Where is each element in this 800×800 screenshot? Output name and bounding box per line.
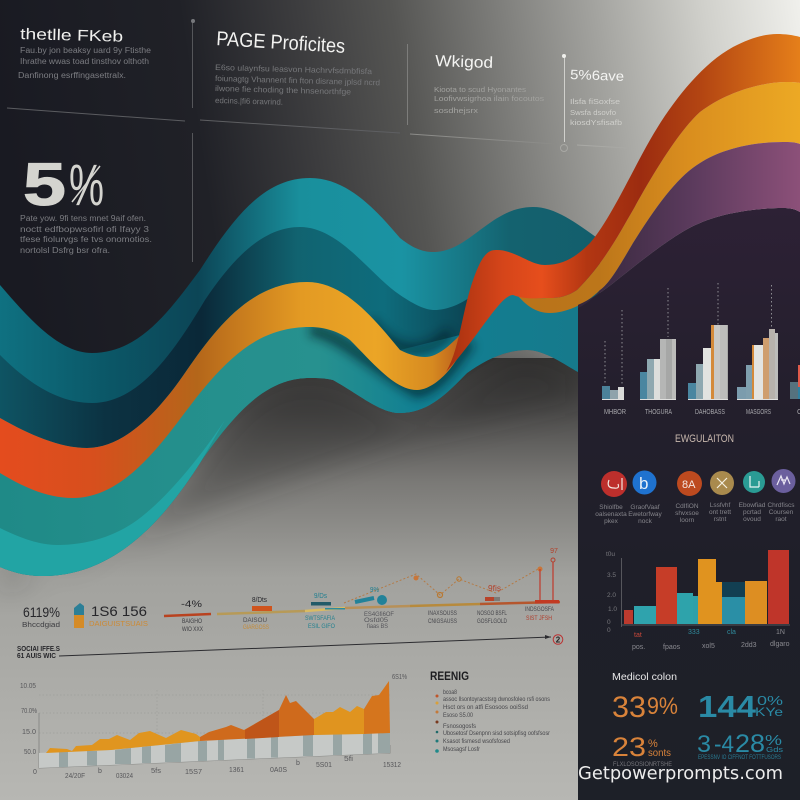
text block: stat description: noctt edfbopwsofirl ofi Ifayy 3 bbox=[20, 225, 150, 234]
event: 8/Dts: DAISOU bbox=[243, 617, 267, 624]
text block: thetlle FKeb: Ihrathe wwas toad tinsthov olthoth bbox=[20, 57, 149, 66]
stats heading: Medicol colon bbox=[612, 671, 677, 683]
icon: blue circle: b bbox=[639, 474, 648, 493]
column labels: DAHOBASS bbox=[695, 409, 725, 416]
text block: arrow label: SOCIAI IFFE.S bbox=[17, 646, 60, 653]
icon labels: pkex bbox=[604, 518, 619, 525]
text block: PAGE Proficites: PAGE Proficites bbox=[216, 28, 346, 58]
axis labels: 1361 bbox=[229, 767, 244, 774]
icon labels: Shiolfbe bbox=[599, 504, 623, 511]
icon labels: rstnt bbox=[714, 516, 727, 523]
text block: PAGE Proficites: edcins.|fi6 oravrind. bbox=[215, 96, 283, 107]
icon labels: Chrdfiscs bbox=[767, 502, 795, 509]
text block: PAGE Proficites: ilwone fie choding the hnsenorthfge bbox=[215, 84, 352, 97]
text block: PAGE Proficites: E6so ulaynfsu leasvon Hachrvfsdmbfisfa bbox=[215, 63, 373, 76]
grey base band bbox=[39, 733, 390, 768]
text block: thetlle FKeb: Danfinong esrffingasettralx. bbox=[18, 71, 126, 80]
stat: 3-428%: 28 bbox=[735, 730, 765, 758]
axis bbox=[622, 558, 790, 627]
stat: 6119% bbox=[22, 605, 60, 629]
event: -4%: -4% bbox=[181, 599, 203, 610]
icon: teal circle bbox=[743, 471, 765, 493]
axis labels: 0A0S bbox=[270, 767, 287, 774]
axis labels: 3.5 bbox=[607, 572, 616, 579]
text block: thetlle FKeb: Fau.by jon beaksy uard 9y Ftisthe bbox=[20, 46, 152, 55]
axis labels: 6S1% bbox=[392, 674, 407, 681]
watermark: Getpowerprompts.com bbox=[578, 763, 783, 784]
stat: 6119%: 6119% bbox=[23, 605, 60, 620]
legend text bbox=[443, 689, 551, 753]
icon labels: raot bbox=[775, 516, 787, 523]
legend text: bcoa8 bbox=[443, 689, 457, 696]
big stat: 5%: % bbox=[69, 153, 104, 218]
icon labels bbox=[595, 502, 795, 525]
arrow line with circled marker: 2 bbox=[556, 636, 561, 644]
stat: 23: 23 bbox=[612, 732, 646, 762]
icon labels: Lssfvhf bbox=[710, 502, 730, 509]
stat: 3-428%: -4 bbox=[714, 731, 734, 758]
axis labels: 15.0 bbox=[22, 729, 36, 736]
x labels: 333 bbox=[688, 629, 700, 636]
x labels: xol5 bbox=[702, 643, 715, 650]
column group 1 bbox=[602, 386, 624, 399]
column group 3 bbox=[688, 325, 728, 399]
x labels: dlgaro bbox=[770, 641, 790, 648]
text block: stat description bbox=[20, 214, 152, 255]
wave: lightest teal sliver bbox=[0, 420, 225, 576]
timeline base line bbox=[164, 602, 560, 616]
icon labels: loorn bbox=[680, 517, 695, 524]
icon labels: oalsenaxta bbox=[595, 511, 627, 518]
text block: PAGE Proficites bbox=[215, 28, 380, 107]
axis labels: 0 bbox=[607, 627, 611, 634]
icon row bbox=[595, 469, 796, 525]
axis labels: 5fs bbox=[151, 768, 162, 775]
heading: EWGULAITON: EWGULAITON bbox=[675, 433, 734, 445]
text block: thetlle FKeb: thetlle FKeb bbox=[20, 26, 123, 46]
area: darker middle sections bbox=[245, 710, 279, 739]
icon: tan circle bbox=[710, 471, 734, 495]
icon labels: Coursen bbox=[769, 509, 794, 516]
text block: Wkigod bbox=[434, 53, 544, 115]
event: end label: INDSGOSFA bbox=[525, 606, 554, 613]
wave: yellow ribbon bbox=[513, 82, 800, 313]
column group 4 bbox=[737, 329, 778, 399]
icon: purple circle bbox=[772, 469, 796, 493]
event: label group 6: INAXSOUSS bbox=[428, 610, 458, 617]
big stat: 5% bbox=[23, 151, 104, 218]
axis labels: 15312 bbox=[383, 762, 401, 769]
event: key marker bbox=[355, 587, 394, 630]
event: end label: 97 bbox=[550, 548, 558, 555]
legend text: Ubosetosf Dsenpnn sisd sotsipfisg oofsfsosr bbox=[443, 730, 551, 737]
bars bbox=[624, 610, 633, 624]
column labels: MASGORS bbox=[746, 409, 771, 416]
text block: stat description: Pate yow. 9fi tens mnet 9aif ofen. bbox=[20, 214, 146, 223]
axis labels: 5fi bbox=[344, 756, 354, 763]
wave: shadow above orange band bbox=[370, 322, 450, 349]
legend text: Msosagsf Losfr bbox=[443, 746, 481, 753]
axis labels: 10.05 bbox=[20, 683, 36, 690]
text block: arrow label: 61 AUIS WIC bbox=[17, 653, 56, 660]
axis labels: 2.0 bbox=[607, 592, 616, 599]
wave: red-orange ribbon bbox=[446, 34, 800, 372]
stat: 3-428%: % bbox=[765, 732, 782, 749]
wave: shadow beneath orange band bbox=[310, 330, 470, 392]
column labels bbox=[604, 409, 800, 416]
stat: 33 9%: 33 bbox=[612, 691, 646, 724]
icon: orange circle: 8A bbox=[682, 479, 696, 491]
wave: lower teal band bbox=[0, 282, 578, 576]
dotted trend line bbox=[344, 568, 540, 603]
x labels: 2dd3 bbox=[741, 642, 757, 649]
axis labels: t0u bbox=[606, 551, 615, 558]
stat: 3-428%: 3 bbox=[697, 731, 711, 758]
text block: Wkigod: Wkigod bbox=[435, 53, 493, 72]
trend markers bbox=[414, 566, 542, 598]
stat captions: FLXLOSOSIONRTSHE bbox=[613, 762, 672, 768]
axis labels bbox=[20, 674, 407, 780]
x labels: pos. bbox=[632, 644, 645, 651]
event: teal marker: SWTSFAFIA bbox=[305, 615, 336, 622]
wave: dark teal band bbox=[0, 227, 470, 470]
icon labels: ovoud bbox=[743, 516, 761, 523]
axis labels: 50.0 bbox=[24, 749, 36, 756]
column labels: MHBOR bbox=[604, 409, 626, 416]
axis labels: 5S01 bbox=[316, 762, 332, 769]
dotted leader lines bbox=[605, 283, 772, 386]
red stems bbox=[540, 562, 553, 601]
stat: 3-428% bbox=[697, 730, 784, 758]
stat: 23 bbox=[612, 732, 671, 762]
grey base columns bbox=[59, 733, 390, 767]
stat: 144 0%: 144 bbox=[698, 689, 757, 724]
icon labels: nock bbox=[638, 518, 653, 525]
event: 8/Dts: 8/Dts bbox=[252, 595, 267, 604]
text block: 5%6ave: Swsfa dsovfo bbox=[570, 108, 616, 117]
icon: blue circle bbox=[632, 470, 656, 494]
wave: orange band bbox=[0, 282, 462, 498]
stat: 1S6 156: 1S6 156 bbox=[91, 603, 147, 619]
event: 8/Dts bbox=[243, 595, 272, 631]
text block: Wkigod: Loofivwsigrhoa ilain focoutos bbox=[434, 94, 544, 103]
event: end label: SIST JFSH bbox=[526, 615, 552, 622]
stat: 144 0%: 0% bbox=[757, 693, 784, 708]
column group 5 bbox=[790, 365, 800, 399]
axis labels: 70.0% bbox=[21, 708, 37, 715]
legend text: Ksasot fismesd wsofsfosed bbox=[443, 738, 510, 745]
event: -4%: BAIGHO bbox=[182, 618, 202, 625]
event: 9/Ds red marker: GOSFLGOLD bbox=[477, 618, 507, 625]
event: key marker: Osfd05 bbox=[364, 617, 388, 624]
event: key marker: ES4Gfi6OF bbox=[364, 611, 394, 618]
x labels: tat bbox=[634, 632, 642, 639]
icon labels: Ewetorfway bbox=[628, 511, 663, 518]
area: orange middle bbox=[200, 695, 314, 741]
legend markers bbox=[435, 694, 439, 753]
stat: 33 9% bbox=[612, 691, 678, 724]
event: 9/Ds red marker: 9fis bbox=[488, 584, 501, 593]
text block: 5%6ave: Ilsfa fiSoxfse bbox=[570, 97, 620, 106]
timeline bbox=[164, 548, 560, 633]
header divider lines bbox=[7, 19, 627, 262]
text block: stat description: tfese fiolurvgs fe tvs onomotios. bbox=[20, 235, 152, 244]
text block: 5%6ave: 5%6ave bbox=[570, 67, 624, 84]
x labels: 1N bbox=[776, 629, 785, 636]
text block: thetlle FKeb bbox=[18, 26, 152, 80]
wave: upper teal band bbox=[0, 178, 600, 576]
legend text: Hsct ors on atfi Esosoos ooiSsd bbox=[443, 704, 528, 711]
event: -4%: WIO XXX bbox=[182, 626, 203, 633]
icon: red circle bbox=[601, 471, 627, 497]
panel: dark right column bbox=[578, 208, 800, 800]
event: 9/Ds red marker bbox=[477, 584, 507, 625]
column labels: THOGURA bbox=[645, 409, 672, 416]
text block: Wkigod: sosdhejsrx bbox=[434, 106, 478, 115]
axis labels: 03024 bbox=[116, 773, 133, 780]
area: orange right bbox=[364, 681, 390, 734]
legend text: Fsnosogosfs bbox=[443, 723, 477, 730]
x labels: fpaos bbox=[663, 644, 681, 651]
axis labels: 24/20F bbox=[65, 773, 85, 780]
text block: 5%6ave: kiosdYsfisafb bbox=[570, 118, 622, 127]
stat: 3-428%: Gds bbox=[766, 747, 784, 754]
axis labels: b bbox=[296, 760, 300, 767]
event: label group 6 bbox=[428, 610, 458, 625]
text block: Wkigod: Kioota to scud Hyonantes bbox=[434, 85, 526, 94]
event: 9/Ds red marker: NOSGO BSFL bbox=[477, 610, 507, 617]
shadow under wave bbox=[0, 360, 578, 590]
icon: orange circle bbox=[677, 471, 702, 496]
stats block bbox=[612, 671, 784, 768]
text block: arrow label bbox=[17, 646, 60, 660]
axes bbox=[39, 713, 390, 768]
stat: 144 0%: KYe bbox=[755, 705, 783, 719]
legend bbox=[430, 669, 551, 753]
big stat: 5%: 5 bbox=[23, 151, 66, 218]
icon labels: Ebowfiad bbox=[739, 502, 766, 509]
stat: 1S6 156 bbox=[89, 603, 148, 628]
wave: purple band bbox=[578, 142, 800, 308]
icon labels: CdIfiON bbox=[675, 503, 699, 510]
event: 8/Dts: GIARGOSS bbox=[243, 624, 269, 631]
bar chart: grouped columns bbox=[602, 283, 800, 416]
stat: 23: % bbox=[648, 738, 658, 750]
legend title: REENIG bbox=[430, 669, 469, 683]
arrow line with circled marker bbox=[59, 635, 563, 656]
legend text: assoc Ilsontoyracstsrg dwnosfoleo rsfi osons bbox=[443, 696, 551, 703]
icon labels: ont trett bbox=[709, 509, 731, 516]
axis labels: 0 bbox=[607, 619, 611, 626]
bar chart: multicolour bbox=[606, 550, 790, 651]
icon: blue-orange bookmark bbox=[74, 603, 84, 628]
icon labels: GraofVaaf bbox=[630, 504, 660, 511]
axis labels bbox=[606, 551, 617, 634]
area chart bbox=[20, 674, 407, 780]
event: teal marker: 9/Ds bbox=[314, 593, 327, 600]
axis labels: b bbox=[98, 768, 102, 775]
axis labels: 15S7 bbox=[185, 769, 202, 776]
area: yellow left bbox=[46, 730, 200, 753]
x labels: cla bbox=[727, 629, 736, 636]
event: end label bbox=[525, 548, 558, 622]
event: key marker: 9% bbox=[370, 587, 379, 594]
event: -4% bbox=[181, 599, 203, 633]
text block: stat description: nortolsl Dsfrg bsr ofra. bbox=[20, 246, 110, 255]
area: yellow right bbox=[314, 706, 364, 735]
legend text: Esoso S5.00 bbox=[443, 712, 473, 719]
stat: 1S6 156: DAIGUISTSUAIS bbox=[89, 619, 148, 628]
icon labels: shvxsoe bbox=[675, 510, 699, 517]
event: label group 6: CNIGSAUSS bbox=[428, 618, 457, 625]
text block: PAGE Proficites: foiunagtg Vhannent fin fton disrane jplsd ncrd bbox=[215, 74, 380, 87]
text block: 5%6ave bbox=[570, 67, 624, 127]
x labels bbox=[632, 629, 790, 651]
event: teal marker: ESIL GIFO bbox=[308, 623, 335, 630]
stat: 144 0% bbox=[698, 689, 784, 724]
axis labels: 1.0 bbox=[608, 606, 617, 613]
stat: 23: sonts bbox=[648, 748, 671, 759]
stat: 6119%: Bhccdgiad bbox=[22, 622, 60, 629]
grid bbox=[39, 690, 390, 760]
stat: 33 9%: 9% bbox=[647, 693, 678, 720]
event: teal marker bbox=[305, 593, 345, 630]
icon labels: pcrtad bbox=[743, 509, 761, 516]
axis labels: 0 bbox=[33, 769, 37, 776]
event: key marker: fiaas BS bbox=[367, 623, 389, 630]
column group 2 bbox=[640, 339, 676, 399]
